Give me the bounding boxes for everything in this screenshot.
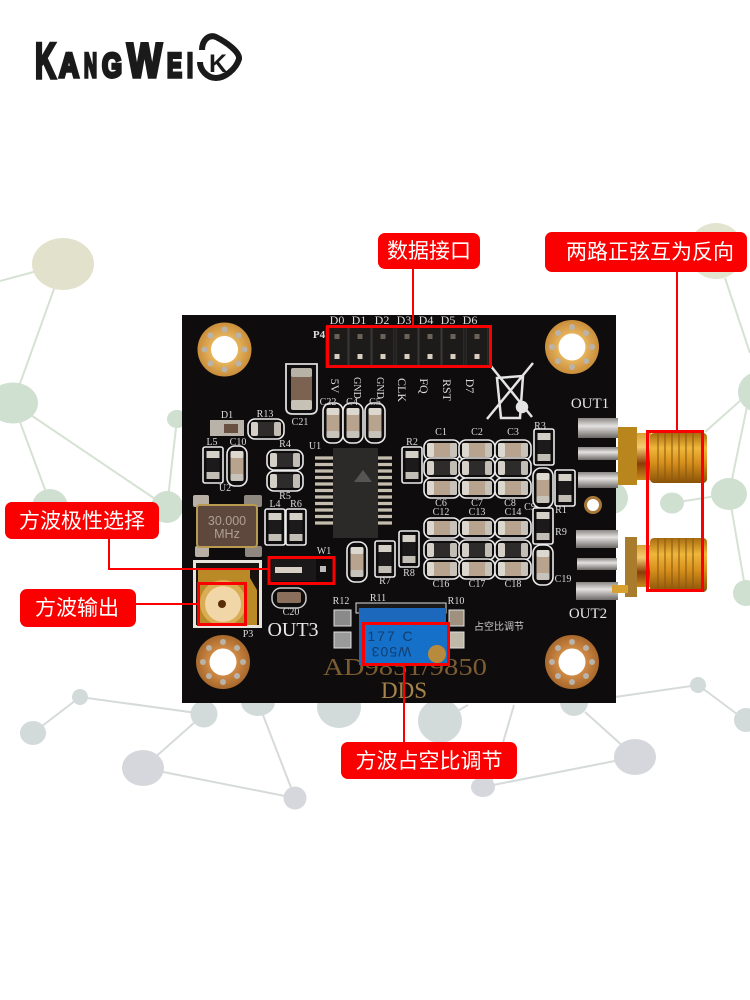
pin header: [326, 327, 488, 367]
connector line: [135, 603, 198, 605]
component labels: P3: [243, 629, 253, 640]
board title: DDS: [381, 678, 427, 703]
potentiometer: W503: [371, 644, 411, 660]
mounting holes: [196, 320, 600, 689]
component labels: C10: [230, 437, 246, 448]
callout: 两路正弦互为反向: [545, 232, 747, 590]
callout: 数据接口: [328, 233, 490, 366]
component labels: R10: [448, 596, 464, 607]
header labels: GND: [351, 377, 362, 399]
header labels: GND: [374, 377, 385, 399]
component labels: R11: [370, 593, 386, 604]
capacitor grids: [402, 429, 575, 585]
callout: 方波极性选择: [5, 502, 334, 584]
component labels: C18: [505, 579, 521, 590]
component labels: C4: [346, 397, 358, 408]
callout: 方波占空比调节: [341, 624, 517, 779]
header labels: D7: [463, 379, 477, 393]
logo wordmark: E: [167, 47, 182, 85]
component labels: R3: [534, 421, 546, 432]
component labels: C7: [471, 498, 483, 509]
component labels: C6: [435, 498, 447, 509]
callout: 两路正弦互为反向: 两路正弦互为反向: [566, 241, 734, 264]
component labels: R5: [279, 491, 291, 502]
header labels: 5V: [328, 379, 342, 394]
label: [545, 232, 747, 272]
callout: 数据接口: 数据接口: [387, 240, 471, 263]
component labels: R6: [290, 499, 302, 510]
component labels: U2: [219, 483, 231, 494]
logo wordmark: A: [59, 47, 79, 85]
board title: AD9851/9850: [323, 655, 487, 681]
connector line: [676, 271, 678, 432]
component labels: R13: [257, 409, 273, 420]
logo emblem: K: [209, 50, 227, 78]
component labels: C21: [292, 417, 308, 428]
large capacitor C21: [286, 364, 317, 414]
component labels: C12: [433, 507, 449, 518]
highlight box: [198, 584, 246, 624]
crystal oscillator: [193, 495, 262, 557]
header labels: RST: [440, 379, 454, 402]
board title: [323, 655, 487, 703]
highlight box: [364, 624, 448, 664]
logo wordmark: K: [35, 33, 56, 89]
component labels: R9: [555, 527, 567, 538]
component labels: C9: [524, 502, 536, 513]
header labels: D2: [375, 313, 389, 327]
potentiometer: [356, 603, 448, 665]
header labels: D5: [441, 313, 455, 327]
right SMA connector top: [578, 418, 707, 488]
component labels: C17: [469, 579, 485, 590]
component labels: C1: [435, 427, 447, 438]
connector line: [109, 538, 269, 569]
callout: 方波输出: [20, 584, 246, 627]
component labels: W1: [317, 546, 331, 557]
component labels: C3: [507, 427, 519, 438]
background network: green nodes: [0, 223, 750, 606]
component labels: C19: [555, 574, 571, 585]
logo wordmark: I: [187, 47, 193, 85]
OUT labels: OUT1: [571, 396, 609, 412]
header labels: D0: [330, 313, 344, 327]
potentiometer: 177 C: [367, 628, 415, 644]
component labels: R4: [279, 439, 291, 450]
header labels: D1: [352, 313, 366, 327]
component labels: R8: [403, 568, 415, 579]
logo emblem: [200, 36, 239, 78]
logo wordmark: G: [102, 47, 122, 85]
SMA connector OUT3: [193, 560, 262, 628]
IC chip: [315, 448, 392, 538]
logo wordmark: N: [84, 47, 97, 85]
header labels: P4: [313, 329, 326, 341]
callout: 方波占空比调节: 方波占空比调节: [356, 750, 502, 773]
component labels: C16: [433, 579, 449, 590]
component labels: R1: [555, 505, 567, 516]
label: [20, 589, 136, 627]
header labels: [313, 313, 477, 402]
callout: 方波输出: 方波输出: [35, 597, 119, 620]
label: [378, 233, 480, 269]
header labels: D6: [463, 313, 477, 327]
highlight box: [648, 432, 702, 590]
OUT labels: OUT3: [267, 619, 319, 641]
highlight box: [328, 326, 490, 366]
header labels: D3: [397, 313, 411, 327]
component labels: C2: [471, 427, 483, 438]
OUT labels: OUT2: [569, 606, 607, 622]
component labels: C13: [469, 507, 485, 518]
background network: grey nodes: [20, 677, 750, 810]
logo: KANGWEI: [35, 33, 239, 89]
test pads R10 R12: [334, 610, 464, 648]
component labels: C5: [369, 397, 381, 408]
highlight box: [269, 558, 334, 584]
duty-cycle text on board: 占空比调节: [474, 620, 524, 633]
header labels: FQ: [417, 378, 431, 394]
jumper W1: [272, 559, 326, 581]
header labels: D4: [419, 313, 433, 327]
connector line: [403, 665, 405, 743]
connector line: [412, 268, 414, 328]
component labels: R2: [406, 437, 418, 448]
component labels: R7: [379, 576, 391, 587]
OUT labels: [267, 396, 609, 641]
component labels: L4: [269, 499, 281, 510]
logo wordmark: [35, 33, 193, 89]
PCB board: [182, 313, 616, 703]
small components: [203, 403, 419, 608]
right SMA connector bottom: [576, 530, 707, 600]
component labels: [206, 397, 571, 640]
component labels: C8: [504, 498, 516, 509]
component labels: U1: [309, 441, 321, 452]
component labels: C14: [505, 507, 521, 518]
crystal oscillator: MHz: [214, 527, 240, 541]
callout: 方波极性选择: 方波极性选择: [19, 510, 145, 533]
logo wordmark: W: [127, 35, 163, 88]
label: [341, 742, 517, 779]
header labels: CLK: [395, 378, 409, 402]
label: [5, 502, 159, 539]
component labels: R12: [333, 596, 349, 607]
component labels: C22: [320, 397, 336, 408]
component labels: L5: [206, 437, 218, 448]
component labels: C20: [283, 607, 299, 618]
component labels: D1: [221, 410, 233, 421]
board body: [182, 315, 616, 703]
crossed-bin icon: [487, 363, 533, 419]
crystal oscillator: 30.000: [208, 514, 246, 528]
